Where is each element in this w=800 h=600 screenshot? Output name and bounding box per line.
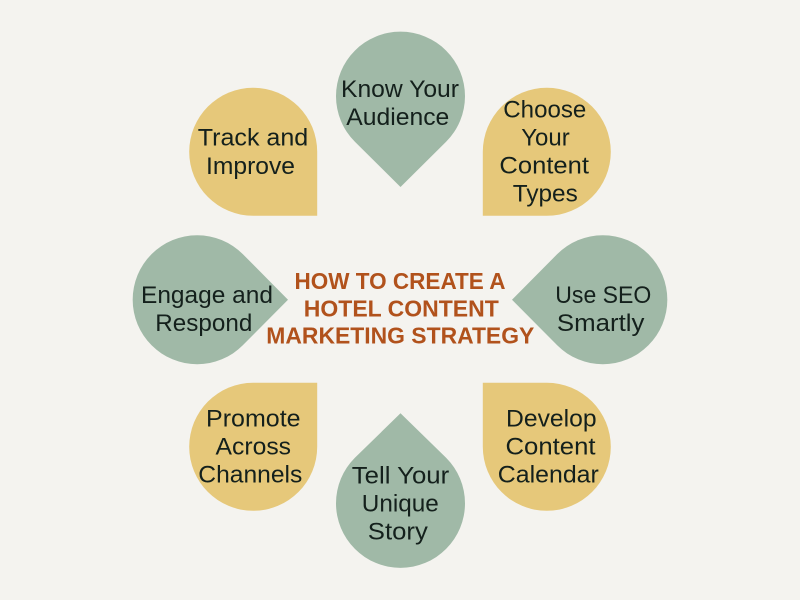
petal: Use SEO Smartly: Smartly [557, 310, 645, 337]
petal: Use SEO Smartly: Use SEO [555, 282, 651, 309]
title: MARKETING STRATEGY [266, 323, 535, 349]
petal: Engage and Respond [133, 235, 288, 364]
petal: Use SEO Smartly [512, 235, 667, 364]
petal: Track and Improve [189, 88, 317, 216]
petal: Choose Your Content Types [483, 88, 611, 216]
petal: Tell Your Unique Story: Unique [362, 490, 439, 518]
petal: Track and Improve: Track and [198, 125, 308, 152]
petal: Develop Content Calendar: Content [506, 434, 596, 461]
petal: Develop Content Calendar: Develop [506, 406, 597, 433]
petal: Know Your Audience: Know Your [341, 76, 459, 103]
petal: Tell Your Unique Story [336, 413, 465, 568]
petal: Engage and Respond: Respond [155, 310, 252, 337]
petal: Tell Your Unique Story: Tell Your [352, 462, 449, 490]
petal: Know Your Audience: Audience [346, 104, 449, 131]
petal: Promote Across Channels: Across [216, 434, 291, 460]
petal: Choose Your Content Types: Content [499, 152, 589, 180]
petal: Promote Across Channels: Channels [198, 462, 302, 488]
petal: Tell Your Unique Story: Story [368, 518, 429, 546]
title: HOTEL CONTENT [304, 296, 499, 322]
petal: Track and Improve: Improve [206, 153, 295, 180]
petal: Promote Across Channels [189, 383, 317, 511]
petal: Know Your Audience [336, 32, 465, 187]
petal: Develop Content Calendar: Calendar [498, 462, 599, 488]
title [266, 268, 535, 349]
petal: Develop Content Calendar [483, 383, 611, 511]
petal: Promote Across Channels: Promote [206, 406, 301, 433]
petal: Choose Your Content Types: Your [521, 124, 570, 152]
petal: Engage and Respond: Engage and [141, 282, 273, 309]
petal: Choose Your Content Types: Types [513, 180, 578, 208]
title: HOW TO CREATE A [294, 268, 506, 294]
petal: Choose Your Content Types: Choose [503, 96, 586, 124]
